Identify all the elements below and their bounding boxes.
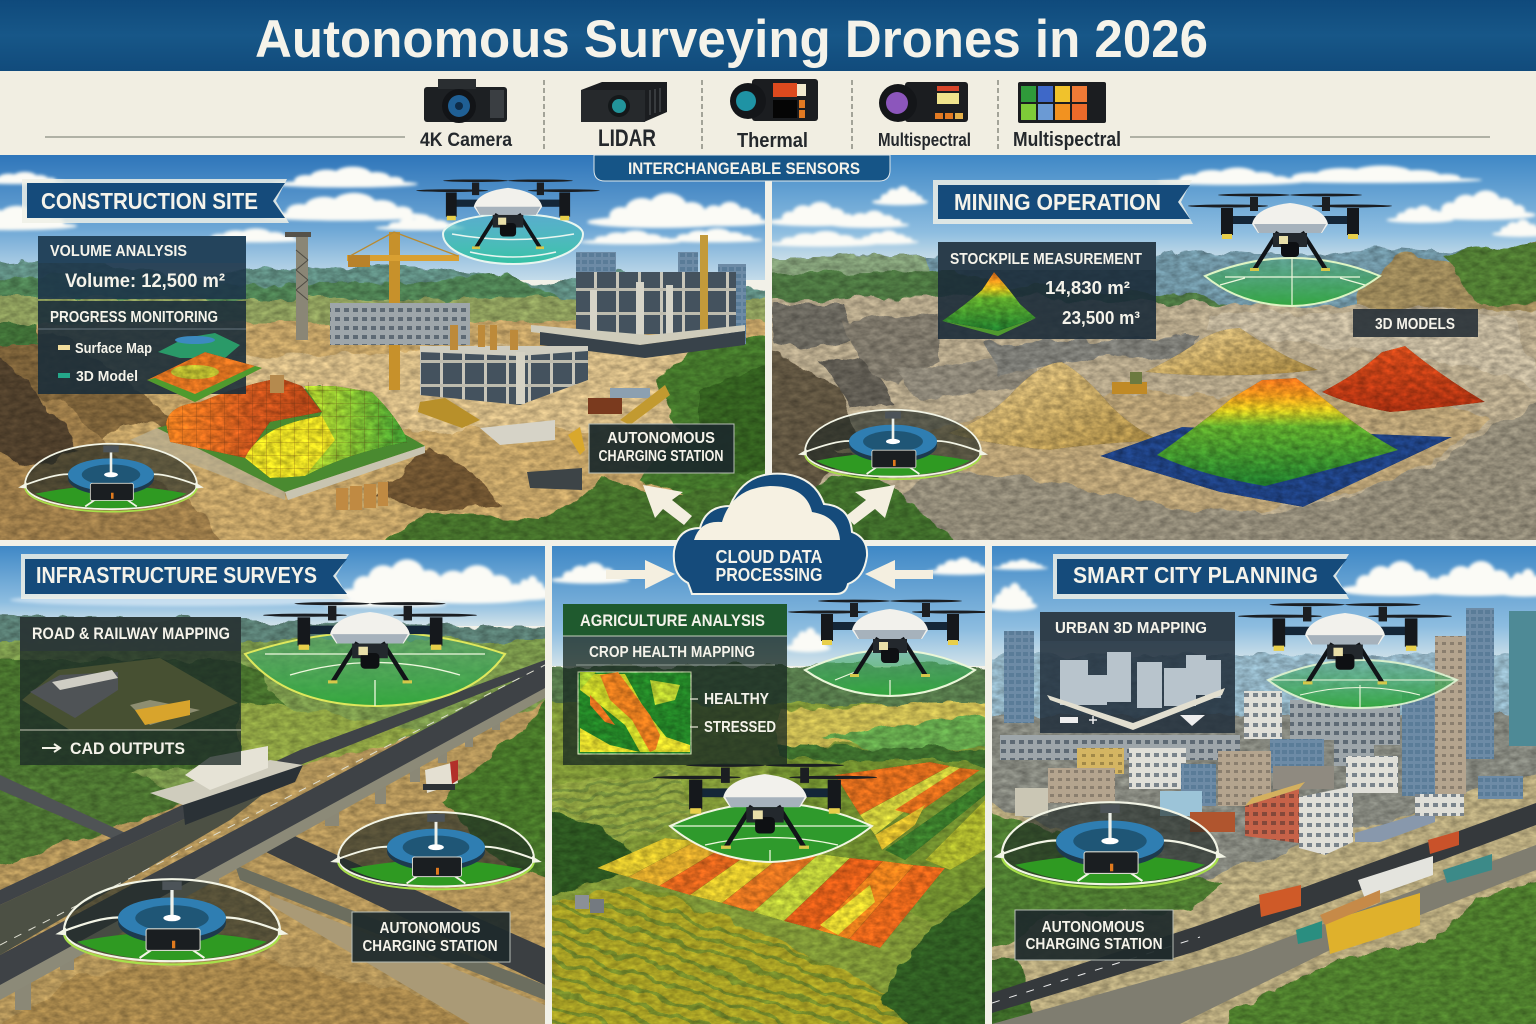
drone: [1238, 603, 1457, 708]
stockpile: red: [1322, 346, 1485, 412]
icon: 4K camera: [424, 79, 507, 123]
panel: progress monitoring: [38, 301, 262, 402]
icon: multispectral filter array: [1018, 82, 1106, 123]
drone: [653, 764, 877, 862]
panel: progress monitoring: Surface Map: [75, 340, 152, 357]
panel: volume analysis: [38, 236, 246, 299]
callout: autonomous charging station: CHARGING STATION: [362, 938, 498, 955]
callout: autonomous charging station: [352, 912, 510, 962]
label: 3D models: [1353, 309, 1478, 337]
panel: progress monitoring: PROGRESS MONITORING: [50, 309, 218, 326]
icon: charging station: [55, 879, 289, 964]
icon: charging station: [993, 802, 1227, 887]
callout: autonomous charging station: [1015, 910, 1173, 960]
trees: [1225, 875, 1536, 1024]
icon: charging station: [330, 812, 542, 889]
callout: autonomous charging station: [589, 424, 734, 473]
panel: smart city planning: [980, 546, 1536, 1024]
sensor band: Multispectral: [878, 130, 971, 150]
panel: road and railway mapping: [20, 617, 241, 765]
panel: agriculture analysis: [540, 546, 1000, 1024]
title: Autonomous Surveying Drones in 2026: [255, 10, 1208, 69]
label: 3D models: 3D MODELS: [1375, 316, 1455, 333]
drone: [245, 602, 505, 706]
sensor band: Multispectral: [1013, 129, 1121, 151]
panel: agriculture analysis card: STRESSED: [704, 719, 776, 736]
icon: charging station: [798, 410, 988, 479]
panel: agriculture analysis card: [563, 604, 787, 765]
icon: thermal: [730, 79, 818, 121]
icon: freight train: [1259, 831, 1492, 954]
panel: road and railway mapping: CAD OUTPUTS: [70, 739, 185, 758]
tab: interchangeable sensors: [594, 155, 890, 181]
banner: infrastructure surveys: INFRASTRUCTURE SURVEYS: [36, 562, 317, 588]
arrow: from agriculture right: [865, 560, 933, 589]
panel: mining operation: [760, 155, 1536, 560]
drone: [788, 600, 992, 696]
banner: infrastructure surveys: [21, 554, 349, 599]
3D terrain model: [130, 375, 425, 500]
panel: road and railway mapping: ROAD & RAILWAY MAPPING: [32, 624, 230, 643]
banner: mining operation: [933, 180, 1193, 224]
panel: construction site: [0, 155, 780, 560]
icon: truck: [423, 760, 458, 793]
banner: smart city planning: [1053, 554, 1349, 599]
callout: autonomous charging station: CHARGING STATION: [598, 448, 724, 465]
arrow: from agriculture left: [606, 560, 675, 589]
panel: stockpile measurement: STOCKPILE MEASUREMENT: [950, 251, 1142, 268]
callout: autonomous charging station: AUTONOMOUS: [1042, 919, 1145, 936]
panel: stockpile measurement: [938, 242, 1156, 339]
arrow: from mining operation: [846, 485, 895, 525]
callout: autonomous charging station: AUTONOMOUS: [607, 430, 715, 447]
icon: cloud data processing: CLOUD DATA: [716, 547, 822, 567]
panel: agriculture analysis card: AGRICULTURE ANALYSIS: [580, 612, 765, 630]
crop strips: lower: [597, 838, 945, 948]
panel: stockpile measurement: 23,500 m³: [1062, 308, 1140, 328]
drone: [416, 179, 600, 264]
icon: cloud data processing: [674, 474, 867, 594]
icon: cranes: [285, 232, 459, 390]
icon: cloud data processing: PROCESSING: [716, 565, 822, 585]
callout: autonomous charging station: AUTONOMOUS: [380, 920, 481, 937]
panel: stockpile measurement: 14,830 m²: [1045, 278, 1130, 298]
icon: multispectral camera: [879, 82, 968, 122]
panel: urban 3D mapping: URBAN 3D MAPPING: [1055, 620, 1207, 637]
site details: machines and materials: [336, 385, 670, 510]
panel: urban 3D mapping: [1040, 612, 1235, 733]
sensor band: [0, 71, 1536, 155]
icon: bulldozer: [1112, 372, 1147, 394]
icon: LIDAR: [581, 82, 667, 122]
banner: construction site: CONSTRUCTION SITE: [41, 188, 258, 214]
stockpile: sand lower: [948, 362, 1160, 450]
icon: field equipment shed: [575, 895, 604, 913]
sensor band: 4K Camera: [420, 130, 512, 151]
road and rail corridor: [992, 803, 1536, 1024]
icon: building under construction: [330, 235, 746, 405]
stockpile: sand upper: [1145, 328, 1318, 376]
banner: construction site: [22, 179, 289, 223]
panel: agriculture analysis card: CROP HEALTH MAPPING: [589, 644, 755, 661]
skyline: [1000, 608, 1536, 855]
drone: [1188, 194, 1392, 306]
arrow: from construction site: [643, 485, 692, 525]
panel: volume analysis: VOLUME ANALYSIS: [50, 243, 187, 260]
stockpile: colour coded 3D model: [1100, 378, 1452, 507]
panel: infrastructure surveys: [0, 546, 560, 1024]
sensor band: LIDAR: [598, 125, 656, 152]
icon: bridge section module: [150, 746, 303, 825]
title: [0, 0, 1536, 71]
icon: charging station: [18, 444, 204, 512]
crop strips: upper: [835, 762, 985, 870]
panel: volume analysis: Volume: 12,500 m²: [65, 271, 225, 292]
panel: agriculture analysis card: HEALTHY: [704, 691, 769, 708]
panel: progress monitoring: 3D Model: [76, 368, 138, 385]
sensor band: Thermal: [737, 130, 808, 152]
banner: mining operation: MINING OPERATION: [954, 189, 1161, 215]
roads and bridge: [0, 660, 545, 1024]
chart: crop health heat map: [578, 672, 691, 754]
callout: autonomous charging station: CHARGING STATION: [1026, 936, 1162, 953]
banner: smart city planning: SMART CITY PLANNING: [1073, 562, 1318, 588]
tab: interchangeable sensors: INTERCHANGEABLE SENSORS: [628, 159, 860, 178]
